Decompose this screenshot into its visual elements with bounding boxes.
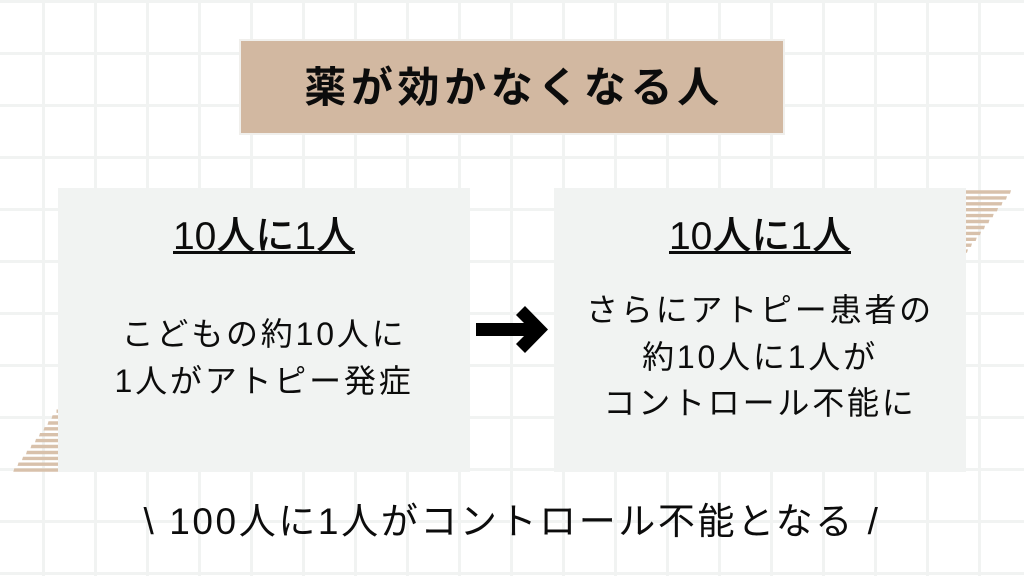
arrow xyxy=(476,306,548,353)
stripes: lower left decoration xyxy=(13,410,58,472)
title text: 薬が効かなくなる人 xyxy=(304,64,724,111)
right panel heading: 10人に1人 xyxy=(669,215,851,258)
left panel body: 1人がアトピー発症 xyxy=(114,362,414,398)
panel: left xyxy=(58,188,470,472)
title banner xyxy=(241,41,783,133)
stripes: upper right decoration xyxy=(966,190,1011,253)
panel: right xyxy=(554,188,966,472)
right panel body: コントロール不能に xyxy=(603,385,917,421)
left panel body xyxy=(114,316,414,398)
left panel heading: 10人に1人 xyxy=(173,215,355,258)
right panel body: 約10人に1人が xyxy=(642,338,878,374)
right panel body: さらにアトピー患者の xyxy=(586,292,934,328)
right panel body xyxy=(586,292,934,421)
left panel body: こどもの約10人に xyxy=(122,316,406,352)
bottom conclusion: \ 100人に1人がコントロール不能となる / xyxy=(143,501,881,542)
